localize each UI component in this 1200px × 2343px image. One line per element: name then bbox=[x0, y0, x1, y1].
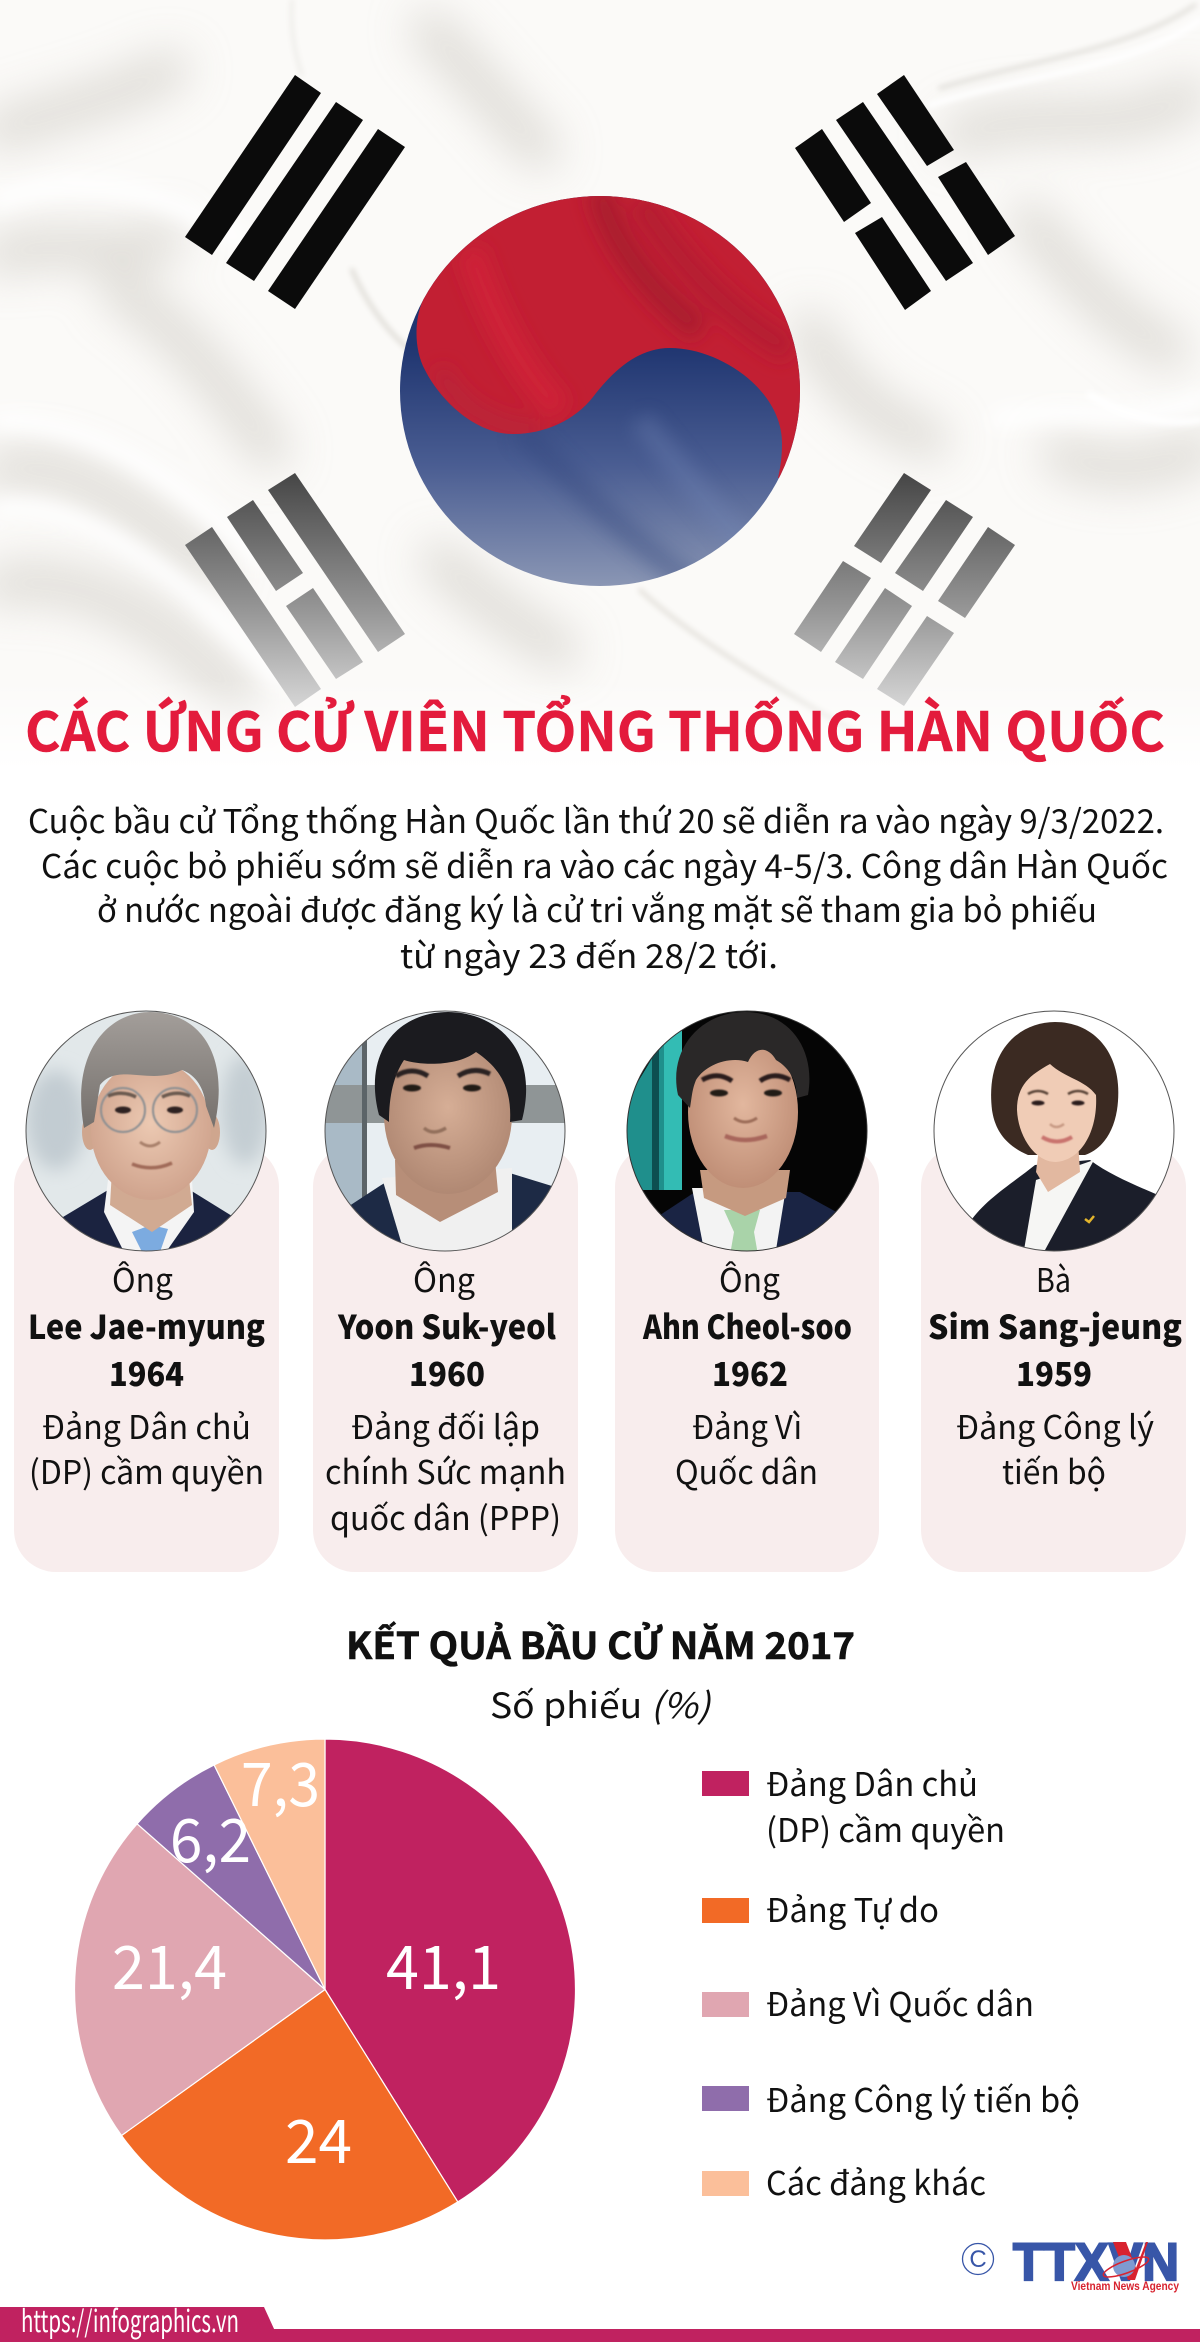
footer bar bbox=[0, 2297, 1200, 2342]
portrait ring bbox=[934, 1011, 1174, 1251]
flag trigram: upper left bbox=[185, 75, 405, 309]
legend: Đảng Tự do bbox=[766, 1884, 939, 1932]
name and party: 1960 bbox=[409, 1348, 485, 1396]
name and party: Lee Jae-myung bbox=[28, 1301, 265, 1349]
section subheading: Số phiếu (%) bbox=[490, 1678, 712, 1729]
name and party: quốc dân (PPP) bbox=[330, 1492, 561, 1540]
flag trigram: upper right bbox=[795, 75, 1015, 310]
name and party bbox=[28, 1254, 265, 1494]
name and party: Bà bbox=[1036, 1254, 1071, 1302]
name and party: 1964 bbox=[109, 1348, 184, 1396]
name and party: 1959 bbox=[1016, 1348, 1092, 1396]
name and party bbox=[325, 1254, 566, 1540]
candidate panel: Yoon Suk-yeol bbox=[313, 1011, 578, 1572]
name and party: Đảng Dân chủ bbox=[42, 1401, 251, 1449]
main title: CÁC ỨNG CỬ VIÊN TỔNG THỐNG HÀN QUỐC bbox=[25, 688, 1165, 767]
portrait ring bbox=[627, 1011, 867, 1251]
candidate panel: Lee Jae-myung bbox=[14, 1011, 279, 1572]
name and party: Sim Sang-jeung bbox=[928, 1301, 1182, 1349]
section heading: KẾT QUẢ BẦU CỬ NĂM 2017 bbox=[346, 1616, 855, 1670]
name and party bbox=[642, 1254, 852, 1494]
taegeuk emblem bbox=[395, 190, 805, 600]
intro paragraph: Các cuộc bỏ phiếu sớm sẽ diễn ra vào các ngày 4-5/3. Công dân Hàn Quốc bbox=[41, 840, 1168, 888]
name and party: Đảng đối lập bbox=[351, 1401, 540, 1449]
name and party: 1962 bbox=[712, 1348, 788, 1396]
pie chart: 21,4 bbox=[112, 1920, 227, 2007]
name and party: Ahn Cheol-soo bbox=[642, 1301, 852, 1349]
logo: TTXVN Vietnam News Agency: C bbox=[969, 2246, 987, 2273]
name and party: Quốc dân bbox=[675, 1446, 818, 1494]
name and party: Ông bbox=[719, 1254, 780, 1302]
legend: (DP) cầm quyền bbox=[766, 1804, 1005, 1852]
portrait: Ahn Cheol-soo bbox=[627, 1011, 880, 1260]
portrait: Yoon Suk-yeol bbox=[325, 1011, 570, 1260]
portrait ring bbox=[26, 1011, 266, 1251]
intro paragraph: ở nước ngoài được đăng ký là cử tri vắng mặt sẽ tham gia bỏ phiếu bbox=[97, 884, 1097, 932]
portrait ring bbox=[325, 1011, 565, 1251]
flag photo background bbox=[0, 0, 1200, 800]
name and party: Ông bbox=[112, 1254, 173, 1302]
candidate panel: Ahn Cheol-soo bbox=[615, 1011, 880, 1572]
legend: Đảng Vì Quốc dân bbox=[766, 1978, 1034, 2026]
candidate panel: Sim Sang-jeung bbox=[921, 1011, 1186, 1572]
intro paragraph bbox=[28, 795, 1168, 978]
legend: Đảng Dân chủ bbox=[766, 1758, 978, 1806]
pie chart: 41,1 bbox=[386, 1920, 501, 2007]
pie chart bbox=[74, 1737, 576, 2240]
name and party: Đảng Công lý bbox=[956, 1401, 1154, 1449]
flag trigram: lower left bbox=[185, 473, 405, 707]
logo: TTXVN Vietnam News Agency: TTXVN bbox=[1013, 2233, 1179, 2292]
intro paragraph: Cuộc bầu cử Tổng thống Hàn Quốc lần thứ 20 sẽ diễn ra vào ngày 9/3/2022. bbox=[28, 795, 1164, 843]
pie chart: 6,2 bbox=[170, 1793, 251, 1880]
legend: Đảng Công lý tiến bộ bbox=[766, 2074, 1080, 2122]
footer url: https://infographics.vn bbox=[21, 2297, 239, 2341]
logo: TTXVN Vietnam News Agency: Vietnam News Agency bbox=[1071, 2279, 1179, 2293]
legend bbox=[702, 1758, 1080, 2205]
portrait: Lee Jae-myung bbox=[26, 1011, 269, 1260]
name and party: Ông bbox=[413, 1254, 475, 1302]
name and party: Yoon Suk-yeol bbox=[337, 1301, 556, 1349]
name and party: tiến bộ bbox=[1002, 1446, 1106, 1494]
intro paragraph: từ ngày 23 đến 28/2 tới. bbox=[400, 930, 778, 978]
name and party: (DP) cầm quyền bbox=[29, 1446, 264, 1494]
portrait: Sim Sang-jeung bbox=[937, 1022, 1171, 1250]
pie chart: 24 bbox=[285, 2094, 352, 2181]
pie chart: 7,3 bbox=[241, 1737, 320, 1824]
name and party: Đảng Vì bbox=[692, 1401, 802, 1449]
flag trigram: lower right bbox=[794, 473, 1015, 706]
legend: Các đảng khác bbox=[766, 2157, 986, 2205]
name and party: chính Sức mạnh bbox=[325, 1446, 566, 1494]
name and party bbox=[928, 1254, 1182, 1494]
